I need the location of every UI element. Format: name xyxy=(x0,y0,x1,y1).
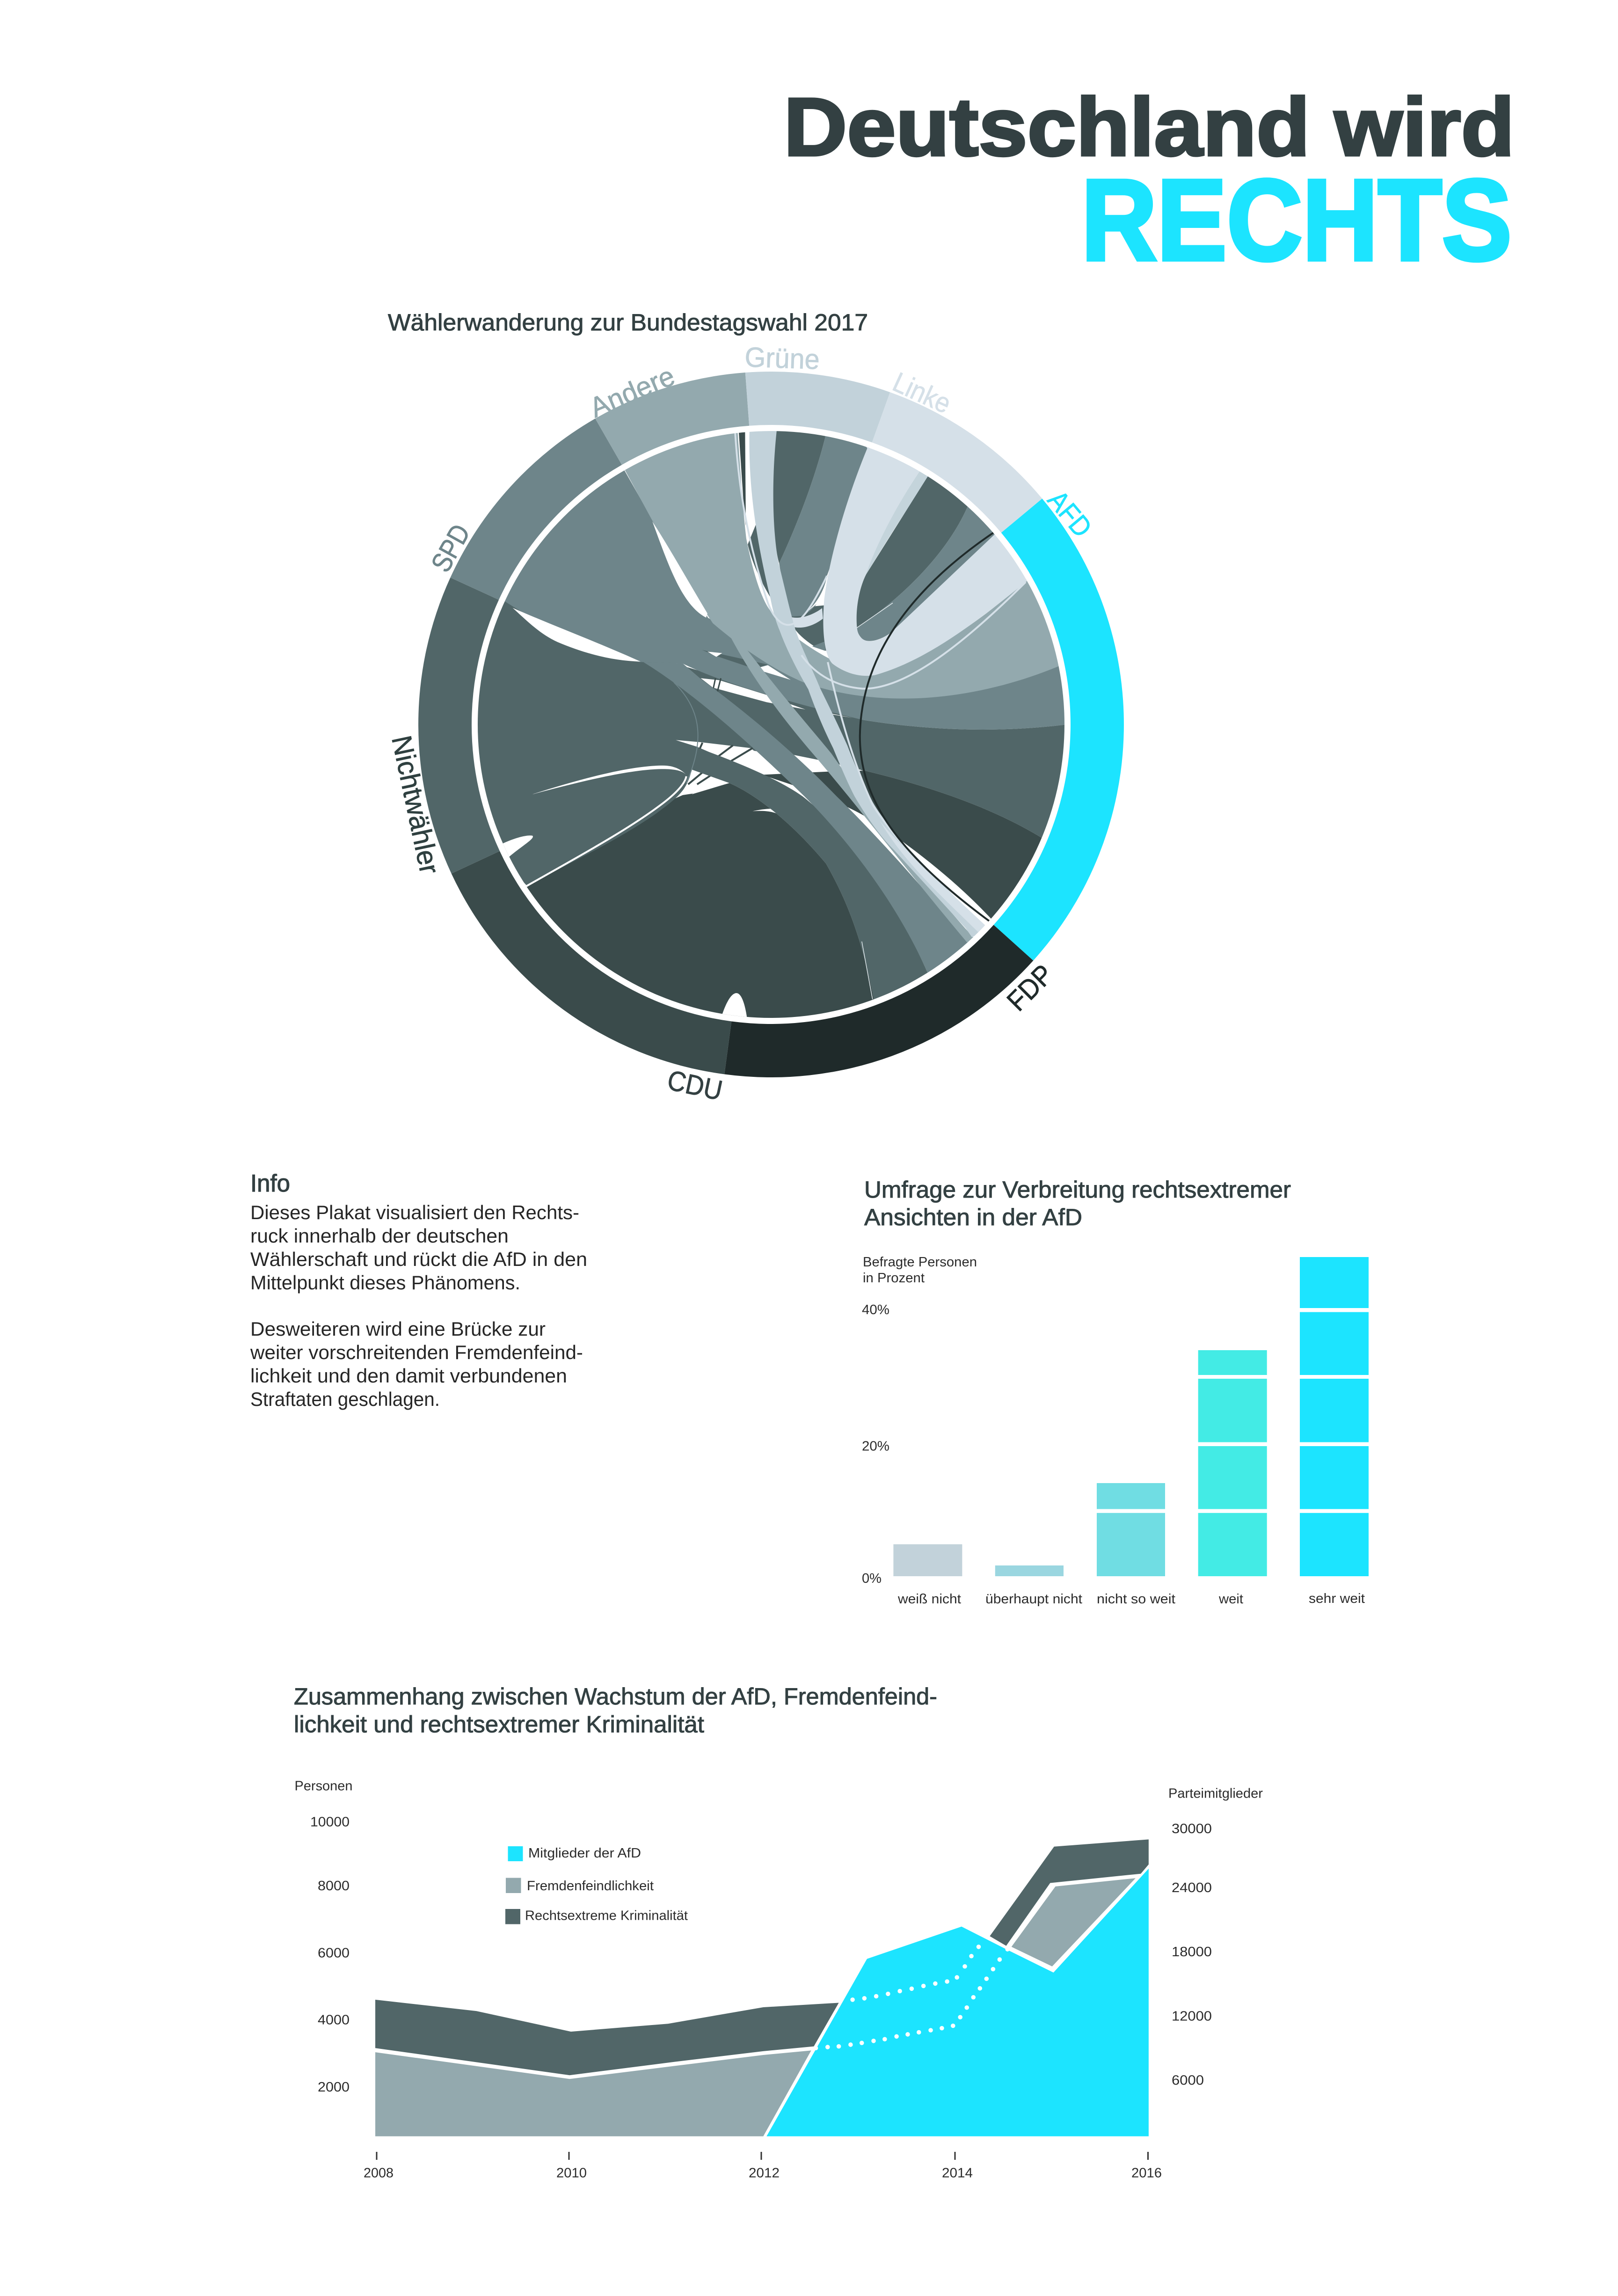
ring: AFD xyxy=(994,498,1124,960)
bar: sehr weit xyxy=(1300,1257,1369,1576)
areas xyxy=(375,1839,1149,2136)
heading: voter migration: Wählerwanderung zur Bundestagswahl 2017 xyxy=(388,309,868,336)
ring: SPD xyxy=(450,418,622,600)
label: Grüne: Grüne xyxy=(744,341,820,375)
left axis labels: 4000 xyxy=(318,2013,350,2028)
area: right-wing crime, right xyxy=(990,1839,1149,1946)
right axis labels: 18000 xyxy=(1172,1945,1212,1960)
y axis labels: 0% xyxy=(862,1571,882,1586)
title xyxy=(784,81,1515,285)
axis title: Befragte Personen xyxy=(863,1255,977,1270)
ring: Grüne xyxy=(745,372,890,442)
left axis labels: 6000 xyxy=(318,1946,350,1961)
info text block: Dieses Plakat visualisiert den Rechts- xyxy=(250,1201,579,1223)
left axis labels xyxy=(310,1815,350,2095)
area: xenophobia, right xyxy=(1012,1878,1136,1967)
x axis labels: nicht so weit xyxy=(1097,1592,1175,1607)
label: Andere: Andere xyxy=(585,360,679,424)
heading: survey: Umfrage zur Verbreitung rechtsextremer xyxy=(864,1177,1291,1203)
x axis: 2014 xyxy=(942,2166,973,2181)
legend xyxy=(505,1846,688,1924)
legend: Fremdenfeindlichkeit xyxy=(527,1879,654,1894)
info text block: Straftaten geschlagen. xyxy=(250,1388,440,1410)
dotted line: upper xyxy=(850,1945,981,2002)
y axis labels: 20% xyxy=(862,1439,889,1454)
x axis labels xyxy=(897,1591,1365,1607)
label: Linke: Linke xyxy=(888,366,956,419)
label: Nichtwähler: Nichtwähler xyxy=(386,733,445,877)
y axis labels: 40% xyxy=(862,1302,889,1317)
x axis xyxy=(364,2152,1162,2181)
x axis: 2008 xyxy=(364,2166,394,2181)
info text block: Wählerschaft und rückt die AfD in den xyxy=(250,1248,587,1270)
x axis labels: sehr weit xyxy=(1309,1591,1365,1606)
left axis labels: 8000 xyxy=(318,1879,350,1894)
left axis labels: 2000 xyxy=(318,2080,350,2095)
right axis labels xyxy=(1172,1821,1212,2088)
x axis labels: überhaupt nicht xyxy=(985,1592,1082,1607)
bar: weit xyxy=(1198,1350,1267,1576)
title: RECHTS xyxy=(1081,156,1512,285)
info heading: Info xyxy=(250,1170,290,1197)
info text block: lichkeit und den damit verbundenen xyxy=(250,1365,567,1387)
axis title: in Prozent xyxy=(863,1271,925,1286)
info text block: weiter vorschreitenden Fremdenfeind- xyxy=(250,1341,583,1363)
info text block: Desweiteren wird eine Brücke zur xyxy=(250,1318,546,1340)
heading: survey: Ansichten in der AfD xyxy=(864,1204,1082,1230)
ring: CDU xyxy=(452,851,731,1074)
right axis labels: 12000 xyxy=(1172,2009,1212,2024)
label: CDU: CDU xyxy=(665,1064,725,1106)
label: AFD: AFD xyxy=(1042,484,1098,543)
heading: survey xyxy=(864,1177,1291,1230)
right axis labels: 6000 xyxy=(1172,2073,1204,2088)
ring: FDP xyxy=(724,925,1033,1077)
heading: correlation xyxy=(294,1683,937,1737)
right axis labels: 30000 xyxy=(1172,1821,1212,1836)
area: right-wing crime, left xyxy=(375,2000,839,2075)
ring: Linke xyxy=(872,392,1042,533)
x axis labels: weiß nicht xyxy=(897,1592,961,1607)
label: FDP: FDP xyxy=(1001,958,1059,1017)
y axis labels xyxy=(862,1302,889,1586)
x axis: 2010 xyxy=(556,2166,587,2181)
heading: correlation: lichkeit und rechtsextremer Kriminalität xyxy=(294,1711,704,1737)
bar: weiß nicht xyxy=(893,1544,962,1576)
left axis labels: 10000 xyxy=(310,1815,350,1830)
ring: Nichtwähler xyxy=(418,578,500,874)
info text block xyxy=(250,1201,587,1410)
chord diagram xyxy=(386,341,1124,1106)
heading: correlation: Zusammenhang zwischen Wachstum der AfD, Fremdenfeind- xyxy=(294,1683,937,1710)
bar chart xyxy=(862,1255,1369,1607)
right axis labels: 24000 xyxy=(1172,1880,1212,1895)
chord ribbons xyxy=(465,424,1076,1044)
legend: Rechtsextreme Kriminalität xyxy=(525,1908,688,1923)
info text block: ruck innerhalb der deutschen xyxy=(250,1225,509,1247)
bar: nicht so weit xyxy=(1097,1483,1165,1576)
label: SPD: SPD xyxy=(425,519,476,577)
axis title xyxy=(863,1255,977,1286)
x axis: 2016 xyxy=(1131,2166,1162,2181)
x axis labels: weit xyxy=(1218,1592,1243,1607)
area: xenophobia, left xyxy=(375,2050,811,2136)
bar: überhaupt nicht xyxy=(995,1565,1064,1576)
left axis title: Personen xyxy=(295,1778,353,1793)
legend: Mitglieder der AfD xyxy=(528,1846,641,1861)
area chart xyxy=(295,1778,1263,2181)
info text block: Mittelpunkt dieses Phänomens. xyxy=(250,1272,520,1294)
dotted line: lower xyxy=(814,1947,1010,2050)
right axis title: Parteimitglieder xyxy=(1168,1786,1263,1801)
area: AfD members xyxy=(766,1869,1149,2136)
title: Deutschland wird xyxy=(784,81,1515,173)
ring: Andere xyxy=(595,373,749,465)
x axis: 2012 xyxy=(749,2166,780,2181)
